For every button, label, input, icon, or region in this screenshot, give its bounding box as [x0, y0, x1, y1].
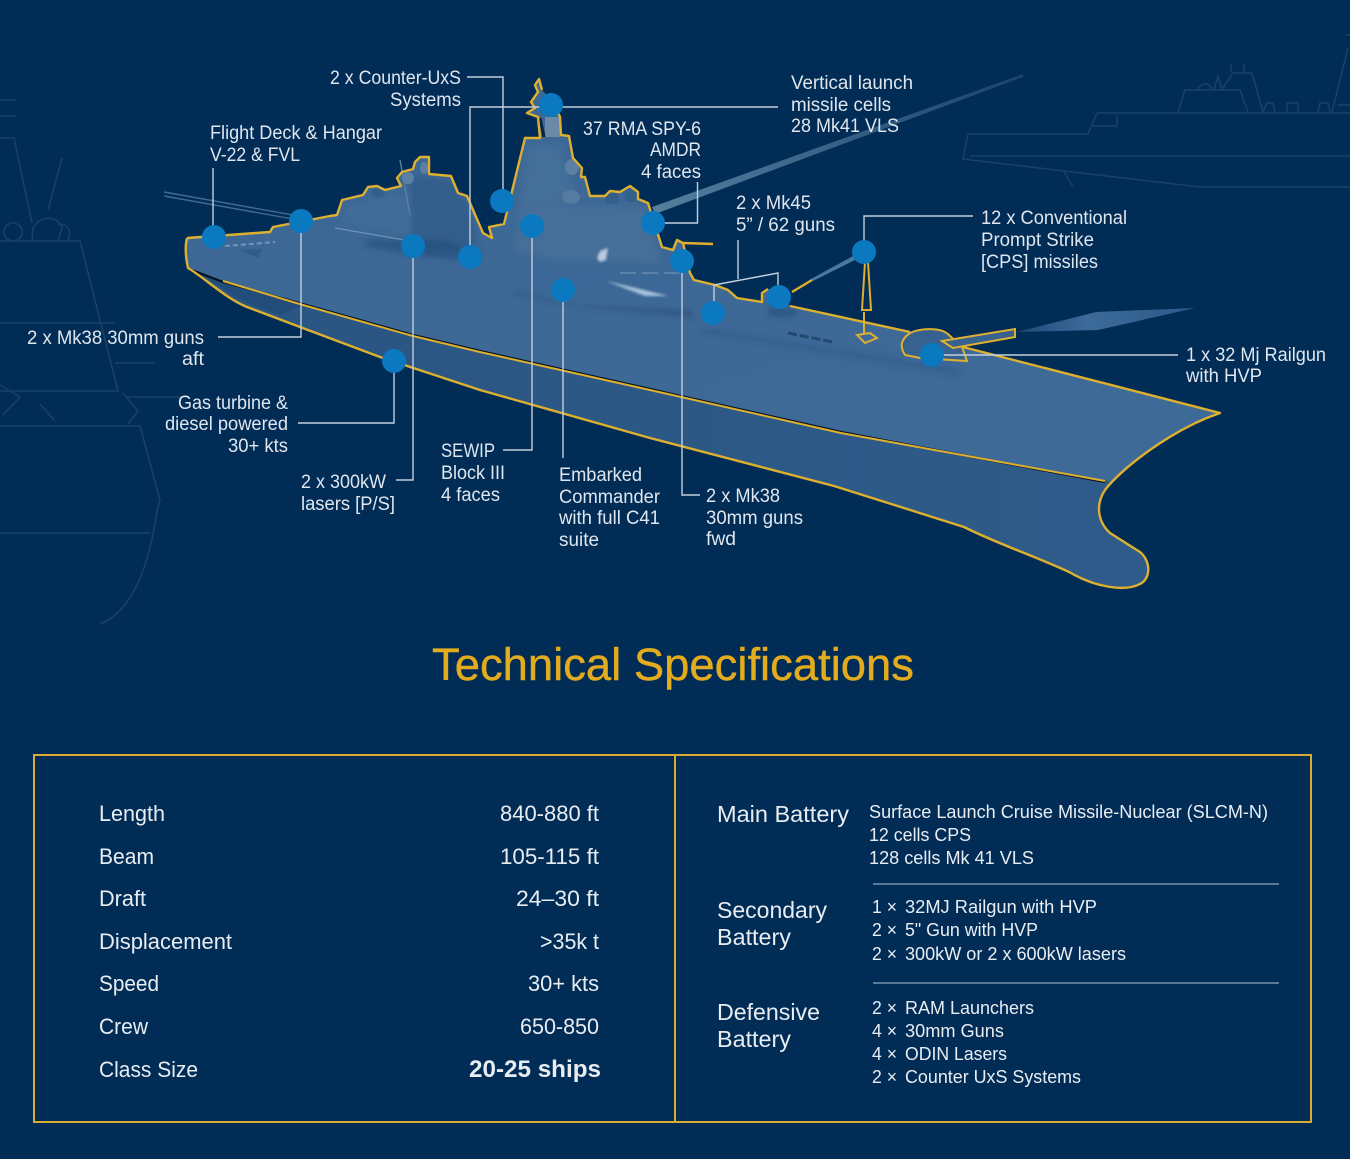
label: CPS: Prompt Strike	[981, 230, 1094, 251]
label: CPS	[981, 208, 1127, 273]
label: gas turbine: 30+ kts	[228, 436, 288, 457]
left column: dimensions: 650-850	[520, 1014, 599, 1039]
secondary battery: Secondary	[717, 897, 827, 923]
left column: dimensions: Beam	[99, 844, 154, 869]
defensive battery	[717, 998, 1081, 1087]
table frame	[34, 755, 1311, 1122]
secondary battery	[717, 897, 1126, 964]
CPS missile	[857, 262, 877, 343]
defensive battery: 30mm Guns	[905, 1021, 1004, 1041]
label: SPY-6	[583, 119, 701, 183]
superstructure shading	[345, 145, 960, 372]
label: railgun	[1185, 345, 1326, 387]
main battery: 128 cells Mk 41 VLS	[869, 848, 1034, 868]
secondary battery: 5" Gun with HVP	[905, 920, 1038, 940]
label: SPY-6: 4 faces	[641, 162, 701, 183]
black chine line	[189, 269, 1105, 482]
label: gas turbine: Gas turbine &	[178, 393, 288, 414]
ship	[186, 79, 1220, 588]
label: embarked commander: Commander	[559, 487, 661, 508]
left column: dimensions: Length	[99, 801, 165, 826]
defensive battery: 2 ×	[872, 1067, 897, 1087]
label: SPY-6: 37 RMA SPY-6	[583, 119, 701, 140]
label: Mk38 fwd: 30mm guns	[706, 508, 803, 529]
label: embarked commander: suite	[559, 530, 599, 551]
left column: dimensions: 105-115 ft	[500, 844, 599, 869]
label: vertical launch: missile cells	[791, 95, 891, 116]
label: Mk38 aft: aft	[182, 349, 205, 370]
label: railgun: 1 x 32 Mj Railgun	[1186, 345, 1326, 366]
label: gas turbine: diesel powered	[165, 414, 288, 435]
secondary battery: Battery	[717, 924, 791, 950]
upper hull and superstructure	[186, 79, 1220, 482]
secondary battery: 2 ×	[872, 944, 897, 964]
defensive battery: 2 ×	[872, 998, 897, 1018]
defensive battery: RAM Launchers	[905, 998, 1034, 1018]
label: CPS: [CPS] missiles	[981, 252, 1098, 273]
chine line yellow	[223, 281, 1105, 481]
defensive battery: Counter UxS Systems	[905, 1067, 1081, 1087]
faint ship elevation, left	[0, 100, 190, 624]
defensive battery: Defensive	[717, 999, 820, 1025]
label: gas turbine	[165, 393, 288, 457]
label: flight deck	[210, 123, 383, 166]
forward gun barrel	[792, 280, 812, 292]
label: vertical launch	[791, 73, 913, 137]
left column: dimensions: Draft	[99, 886, 146, 911]
label: Mk45	[736, 193, 835, 236]
dark stern underside	[190, 269, 303, 315]
defensive battery: 4 ×	[872, 1044, 897, 1064]
label: CPS: 12 x Conventional	[981, 208, 1127, 229]
label: Mk38 fwd: 2 x Mk38	[706, 486, 780, 507]
label: Mk38 fwd	[706, 486, 803, 550]
label: Mk45: 5” / 62 guns	[736, 215, 835, 236]
left column: dimensions	[99, 801, 601, 1083]
label: SEWIP: SEWIP	[441, 441, 495, 462]
main battery	[717, 801, 1268, 868]
secondary battery: 2 ×	[872, 920, 897, 940]
superstructure details	[225, 117, 833, 342]
main battery: 12 cells CPS	[869, 825, 971, 845]
label: lasers	[301, 472, 395, 515]
label: Mk45: 2 x Mk45	[736, 193, 811, 214]
secondary battery: 1 ×	[872, 897, 897, 917]
main battery: Main Battery	[717, 801, 850, 827]
label: embarked commander: Embarked	[559, 465, 642, 486]
secondary battery: 300kW or 2 x 600kW lasers	[905, 944, 1126, 964]
defensive battery: 4 ×	[872, 1021, 897, 1041]
label: lasers: lasers [P/S]	[301, 494, 395, 515]
label: counter-UxS: Systems	[390, 90, 461, 111]
label: counter-UxS	[330, 68, 461, 111]
label: flight deck: Flight Deck & Hangar	[210, 123, 383, 144]
label: Mk38 aft: 2 x Mk38 30mm guns	[27, 328, 204, 349]
missile trails	[164, 74, 1195, 332]
left column: dimensions: 840-880 ft	[500, 801, 599, 826]
left column: dimensions: Speed	[99, 971, 159, 996]
left column: dimensions: Crew	[99, 1014, 148, 1039]
label: counter-UxS: 2 x Counter-UxS	[330, 68, 461, 89]
main battery: Surface Launch Cruise Missile-Nuclear (SLCM-N)	[869, 802, 1268, 822]
title: Technical Specifications	[432, 639, 914, 690]
label: embarked commander: with full C41	[558, 508, 660, 529]
secondary battery: 32MJ Railgun with HVP	[905, 897, 1097, 917]
callout dots	[202, 93, 944, 373]
label: embarked commander	[558, 465, 661, 551]
left column: dimensions: Displacement	[99, 929, 232, 954]
left column: dimensions: 30+ kts	[528, 971, 599, 996]
label: SEWIP: Block III	[441, 463, 505, 484]
defensive battery: ODIN Lasers	[905, 1044, 1007, 1064]
yellow outline of silhouette	[186, 79, 1220, 588]
label: SEWIP: 4 faces	[441, 485, 500, 506]
label: SPY-6: AMDR	[650, 140, 701, 161]
left column: dimensions: Class Size	[99, 1057, 198, 1082]
railgun	[902, 329, 1015, 361]
defensive battery: Battery	[717, 1026, 791, 1052]
faint ship elevation, right	[963, 35, 1350, 187]
leader lines	[213, 77, 1178, 495]
label: vertical launch: 28 Mk41 VLS	[791, 116, 899, 137]
hull silhouette	[186, 79, 1220, 588]
left column: dimensions: >35k t	[540, 929, 599, 954]
label: lasers: 2 x 300kW	[301, 472, 386, 493]
label: vertical launch: Vertical launch	[791, 73, 913, 94]
specifications table	[34, 755, 1311, 1122]
left column: dimensions: 24–30 ft	[516, 886, 599, 911]
label: Mk38 fwd: fwd	[706, 529, 736, 550]
divider	[873, 884, 1279, 983]
label: railgun: with HVP	[1185, 366, 1262, 387]
label: Mk38 aft	[27, 328, 205, 370]
left column: dimensions: 20-25 ships	[469, 1056, 601, 1083]
label: SEWIP	[441, 441, 505, 506]
label: flight deck: V-22 & FVL	[210, 145, 300, 166]
